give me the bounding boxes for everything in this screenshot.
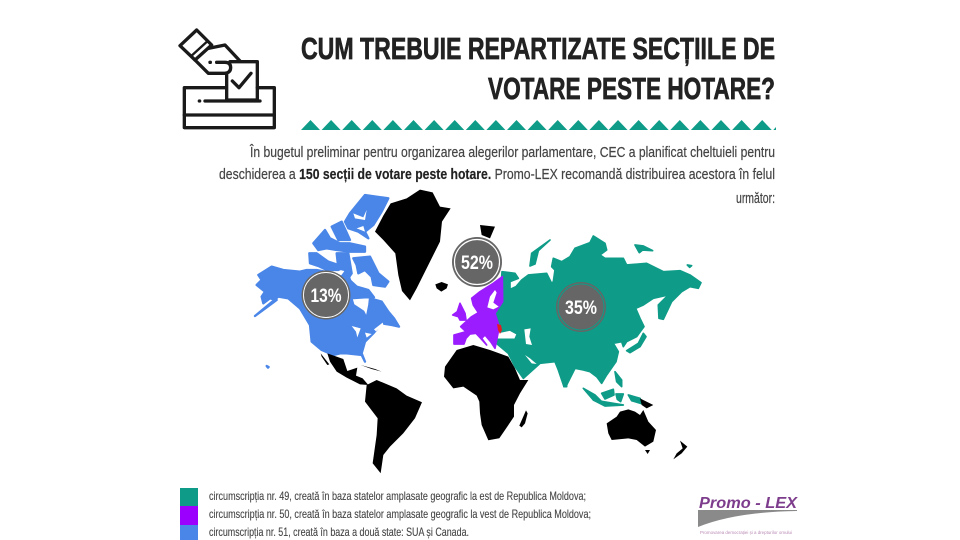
logo: Promo-LEX: Promovarea democrației și a drepturilor omului — [700, 530, 792, 535]
map: Caspian Sea and Persian Gulf cutouts — [524, 328, 537, 364]
map: North America (constituency 51) — [255, 195, 399, 368]
logo: Promo-LEX: Promo - LEX — [699, 495, 799, 512]
map: Great Lakes and Arctic cutouts — [352, 210, 383, 338]
intro text: următor: — [736, 190, 775, 207]
title — [301, 31, 775, 106]
legend label: constituency 50: circumscripția nr. 50, creată în baza statelor amplasate geografic la vest de Republica Moldova; — [209, 507, 591, 521]
legend label: constituency 49: circumscripția nr. 49, creată în baza statelor amplasate geografic la est de Republica Moldova; — [209, 489, 586, 503]
intro text — [219, 144, 775, 207]
data badge: 35% — [556, 282, 606, 332]
map: Baltic Sea cutout — [487, 290, 499, 309]
data badge: 52% — [452, 237, 502, 287]
logo: Promo-LEX — [698, 495, 799, 535]
intro text: deschiderea a 150 secții de votare peste hotare. Promo-LEX recomandă distribuirea acestora în felul — [219, 166, 775, 183]
world map — [255, 190, 701, 473]
icon: ballot box — [180, 30, 274, 128]
legend swatch: constituency 49 — [180, 488, 198, 506]
data badge: 13%: 13% — [310, 286, 342, 307]
map: Europe (constituency 50) — [453, 277, 503, 348]
map: Africa — [444, 225, 528, 440]
title: CUM TREBUIE REPARTIZATE SECȚIILE DE — [301, 31, 775, 66]
legend label: constituency 51: circumscripția nr. 51, creată în baza a două state: SUA și Canada. — [209, 525, 469, 539]
decorative triangle divider — [301, 120, 776, 130]
intro text: În bugetul preliminar pentru organizarea alegerilor parlamentare, CEC a planificat cheltuieli pentru — [249, 144, 775, 161]
data badge: 35%: 35% — [565, 298, 597, 319]
map: Australia and Oceania — [607, 398, 687, 459]
map: Greenland and Iceland — [375, 190, 451, 300]
map: Moldova — [497, 324, 502, 334]
data badge: 13% — [302, 270, 350, 320]
legend swatch: constituency 50 — [180, 506, 198, 525]
map: Mexico, Central and South America — [321, 353, 422, 473]
map: Asia (constituency 49) — [495, 236, 701, 406]
legend — [180, 488, 591, 540]
data badge: 52%: 52% — [461, 253, 493, 274]
legend swatch: constituency 51 — [180, 525, 198, 540]
title: VOTARE PESTE HOTARE? — [488, 71, 775, 106]
